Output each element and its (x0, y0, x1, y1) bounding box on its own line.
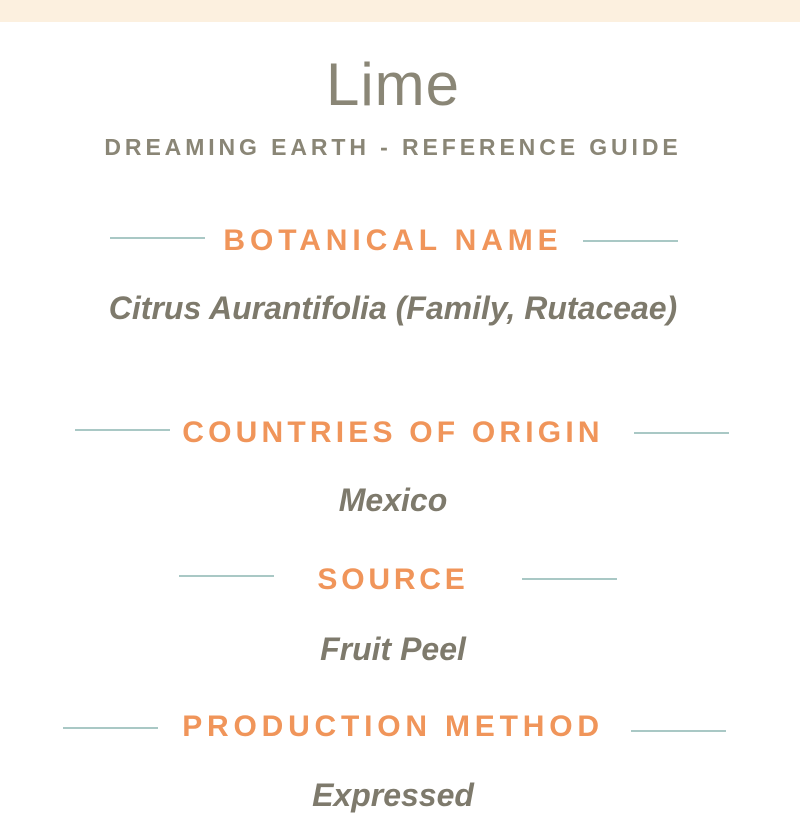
text: countries: Mexico (339, 482, 447, 518)
text: source: Fruit Peel (320, 631, 466, 667)
heading: botanical name: BOTANICAL NAME (223, 224, 563, 257)
section: production method (63, 710, 726, 813)
heading: source: SOURCE (317, 563, 469, 596)
text: production method: Expressed (312, 777, 474, 813)
heading: countries: COUNTRIES OF ORIGIN (182, 416, 604, 449)
text: botanical name: Citrus Aurantifolia (Family, Rutaceae) (109, 290, 677, 326)
section: countries of origin (75, 416, 729, 518)
top band (0, 0, 800, 22)
section: source (179, 563, 617, 667)
subtitle: DREAMING EARTH - REFERENCE GUIDE (104, 134, 682, 160)
heading: production method: PRODUCTION METHOD (182, 710, 604, 743)
section: botanical name (109, 224, 678, 326)
title: Lime (326, 51, 460, 118)
